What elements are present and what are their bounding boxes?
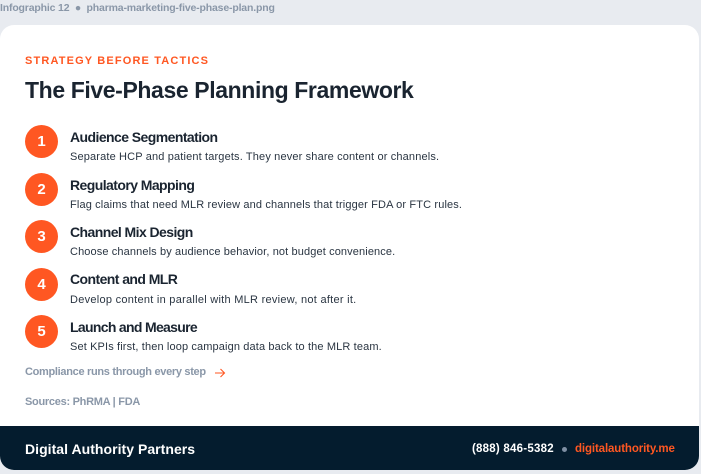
number badge 3 [25,220,58,253]
website: digitalauthority.me [575,443,675,455]
dot separator [562,447,567,452]
step 2 description: Flag claims that need MLR review and channels that trigger FDA or FTC rules. [70,199,462,211]
phone: (888) 846-5382 [472,443,554,455]
step 4 heading: Content and MLR [70,271,177,287]
step 3 heading: Channel Mix Design [70,224,193,240]
number badge 1 [25,125,58,158]
step 1 [25,125,439,163]
number badge 5 [25,315,58,348]
compliance note: Compliance runs through every step [25,366,206,378]
step 1 description: Separate HCP and patient targets. They never share content or channels. [70,151,439,163]
number badge 2 [25,173,58,206]
brand name: Digital Authority Partners [25,441,195,457]
sources: Sources: PhRMA | FDA [25,396,140,408]
file caption: Infographic 12 ● pharma-marketing-five-phase-plan.png [0,2,275,14]
number badge 4: 4 [37,276,46,293]
step 4 description: Develop content in parallel with MLR review, not after it. [70,294,357,306]
title: The Five-Phase Planning Framework [25,77,413,103]
footer bar [0,426,699,470]
step 4 [25,268,357,306]
number badge 1: 1 [37,133,46,150]
step 1 heading: Audience Segmentation [70,129,218,145]
step 3 [25,220,395,258]
number badge 4 [25,268,58,301]
icon: arrow [215,368,226,378]
number badge 5: 5 [37,323,46,340]
number badge 3: 3 [37,228,46,245]
step 2 [25,173,462,211]
step 5 description: Set KPIs first, then loop campaign data back to the MLR team. [70,341,382,353]
step 5 heading: Launch and Measure [70,319,197,335]
step 5 [25,315,382,353]
step 3 description: Choose channels by audience behavior, not budget convenience. [70,246,395,258]
number badge 2: 2 [37,181,46,198]
eyebrow: STRATEGY BEFORE TACTICS [25,55,209,67]
step 2 heading: Regulatory Mapping [70,177,194,193]
